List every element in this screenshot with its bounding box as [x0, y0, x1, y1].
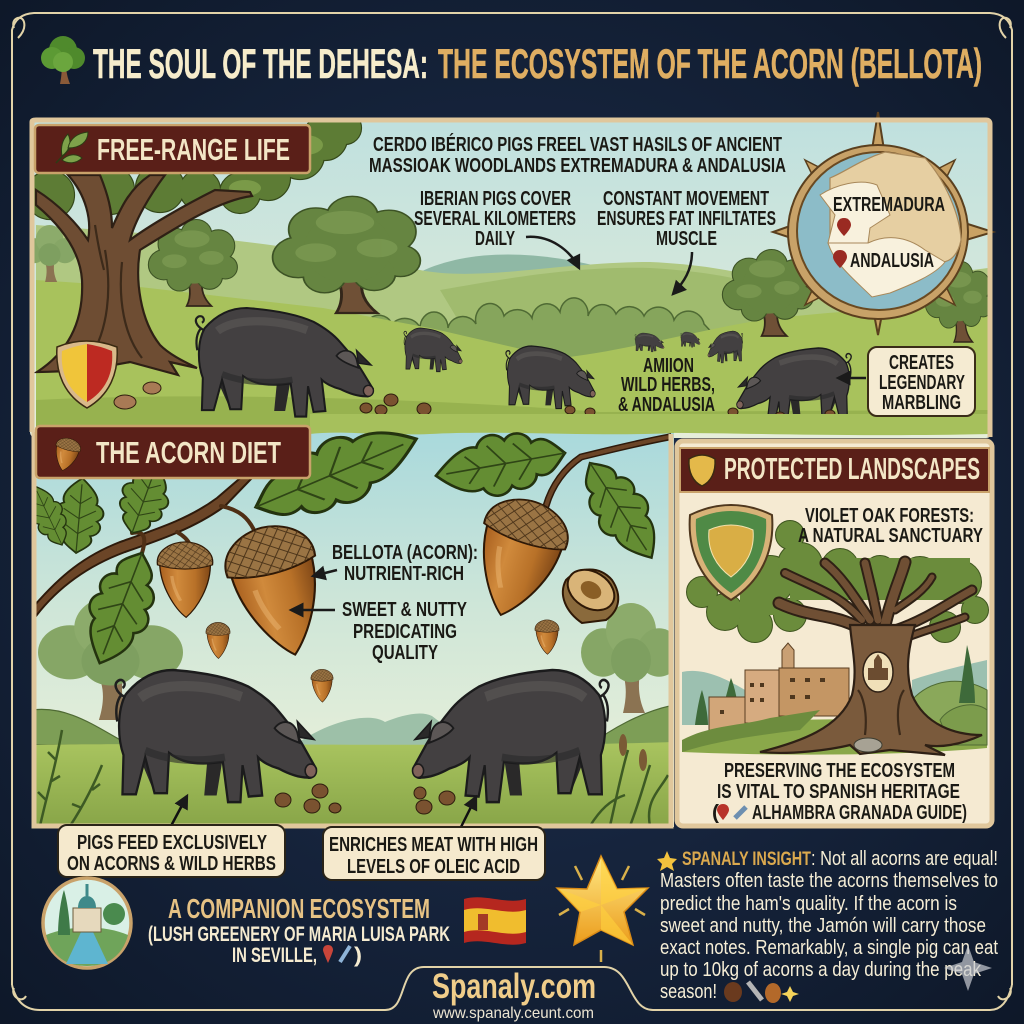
- text: companion ecosystem: (LUSH GREENERY OF MARIA LUISA PARK: [148, 923, 450, 946]
- callout: pigs feed: [58, 796, 285, 877]
- callout: oleic acid: LEVELS OF OLEIC ACID: [347, 855, 520, 878]
- heading: free-range life: FREE-RANGE LIFE: [97, 132, 290, 167]
- callout: herbs: WILD HERBS,: [621, 373, 715, 396]
- icon: small star: [657, 851, 677, 871]
- castle: [709, 643, 849, 730]
- icon: acorn: [50, 435, 83, 474]
- trees: [22, 197, 992, 342]
- acorns: [157, 489, 622, 702]
- grass fade: [310, 420, 674, 434]
- oak tree canopy: [687, 521, 988, 642]
- text: sanctuary: [798, 504, 983, 547]
- callout: movement: CONSTANT MOVEMENT: [603, 187, 769, 210]
- callout: oleic acid: ENRICHES MEAT WITH HIGH: [329, 833, 538, 856]
- callout: herbs: & ANDALUSIA: [618, 393, 715, 416]
- cypress trees: [695, 645, 975, 725]
- callout: marbling: [838, 347, 975, 416]
- callout: marbling: CREATES: [889, 351, 954, 374]
- callout: distance: [414, 187, 579, 268]
- panel: acorn diet: [20, 408, 681, 827]
- title: [41, 36, 982, 87]
- text: nutrient-rich: [313, 541, 478, 585]
- text: heritage: [712, 759, 967, 824]
- acorns on ground: [114, 382, 835, 420]
- meadow scene: [32, 597, 681, 827]
- big oak left: [26, 112, 361, 375]
- callout: marbling: LEGENDARY: [879, 371, 965, 394]
- panel: free-range life: [22, 112, 993, 438]
- text: nutrient-rich: NUTRIENT-RICH: [344, 562, 464, 585]
- callout: herbs: AMIION: [643, 354, 694, 377]
- oak tree trunk: [779, 562, 972, 640]
- callout: herbs: [618, 354, 715, 416]
- heading: the acorn diet: THE ACORN DIET: [96, 435, 281, 470]
- callout: marbling: MARBLING: [882, 391, 961, 414]
- text: heritage: (: [712, 801, 719, 824]
- footer: brand: www.spanaly.ceunt.com: [432, 1005, 594, 1022]
- text: spanaly insight: SPANALY INSIGHT: [682, 849, 811, 870]
- icon: leaf: [56, 132, 88, 163]
- text: spanaly insight: predict the ham's quality. If the acorn is: [660, 892, 957, 915]
- plants: [38, 730, 668, 826]
- title text left: THE SOUL OF THE DEHESA:: [93, 40, 428, 87]
- map compass: EXTREMADURA: [833, 193, 945, 216]
- callout: distance: SEVERAL KILOMETERS: [414, 207, 576, 230]
- intro text: MASSIOAK WOODLANDS EXTREMADURA & ANDALUSIA: [369, 154, 786, 177]
- landscape: [36, 225, 990, 432]
- callout: pigs feed: ON ACORNS & WILD HERBS: [67, 852, 276, 875]
- icon: star: [557, 856, 648, 962]
- panel frame: [32, 120, 990, 437]
- icon: tree: [41, 36, 85, 84]
- heading: protected landscapes: [680, 448, 989, 492]
- footer: brand: [432, 967, 596, 1022]
- panel: protected landscapes: [677, 441, 992, 826]
- callout: pigs feed: PIGS FEED EXCLUSIVELY: [77, 831, 267, 854]
- pigs feeding: [116, 670, 609, 802]
- heading: free-range life: [35, 125, 310, 173]
- text: nutrient-rich: BELLOTA (ACORN):: [332, 541, 478, 564]
- icon: heraldic shield: [57, 341, 117, 408]
- text: companion ecosystem: A COMPANION ECOSYSTEM: [168, 893, 430, 924]
- callout: oleic acid: [323, 797, 545, 880]
- text: companion ecosystem: ): [354, 944, 362, 967]
- icon: sparkle watermark: [944, 945, 992, 991]
- frame: [34, 432, 671, 826]
- text: sweet and nutty: [291, 598, 467, 664]
- map compass: ANDALUSIA: [850, 249, 934, 272]
- branches: [34, 435, 680, 616]
- text: sweet and nutty: QUALITY: [372, 641, 438, 664]
- text: companion ecosystem: IN SEVILLE,: [232, 944, 317, 967]
- callout: movement: MUSCLE: [656, 227, 717, 250]
- text: sweet and nutty: SWEET & NUTTY: [342, 598, 467, 621]
- callout: movement: ENSURES FAT INFILTATES: [597, 207, 776, 230]
- icon: park medallion: [43, 878, 131, 968]
- fallen acorns: [275, 784, 455, 814]
- text: spanaly insight: [657, 847, 998, 1003]
- icon: spanish flag: [464, 897, 526, 945]
- tree hollow: [854, 652, 904, 752]
- text: sweet and nutty: PREDICATING: [353, 620, 457, 643]
- heading: the acorn diet: [36, 426, 310, 478]
- pigs: [196, 308, 851, 422]
- text: companion ecosystem: [148, 893, 450, 967]
- oak leaves: [20, 408, 674, 674]
- callout: movement: [597, 187, 776, 294]
- text: spanaly insight: season!: [660, 980, 717, 1003]
- intro text: [369, 133, 786, 177]
- icon: shield small: [689, 455, 715, 486]
- callout: distance: DAILY: [475, 227, 515, 250]
- grass strip below panel: [310, 414, 990, 435]
- callout: distance: IBERIAN PIGS COVER: [420, 187, 571, 210]
- map compass: [773, 112, 993, 335]
- footer: brand: Spanaly.com: [432, 967, 596, 1006]
- intro text: CERDO IBÉRICO PIGS FREEL VAST HASILS OF ANCIENT: [373, 133, 782, 156]
- landscape scene: [682, 643, 987, 755]
- icon: green shield: [690, 505, 772, 600]
